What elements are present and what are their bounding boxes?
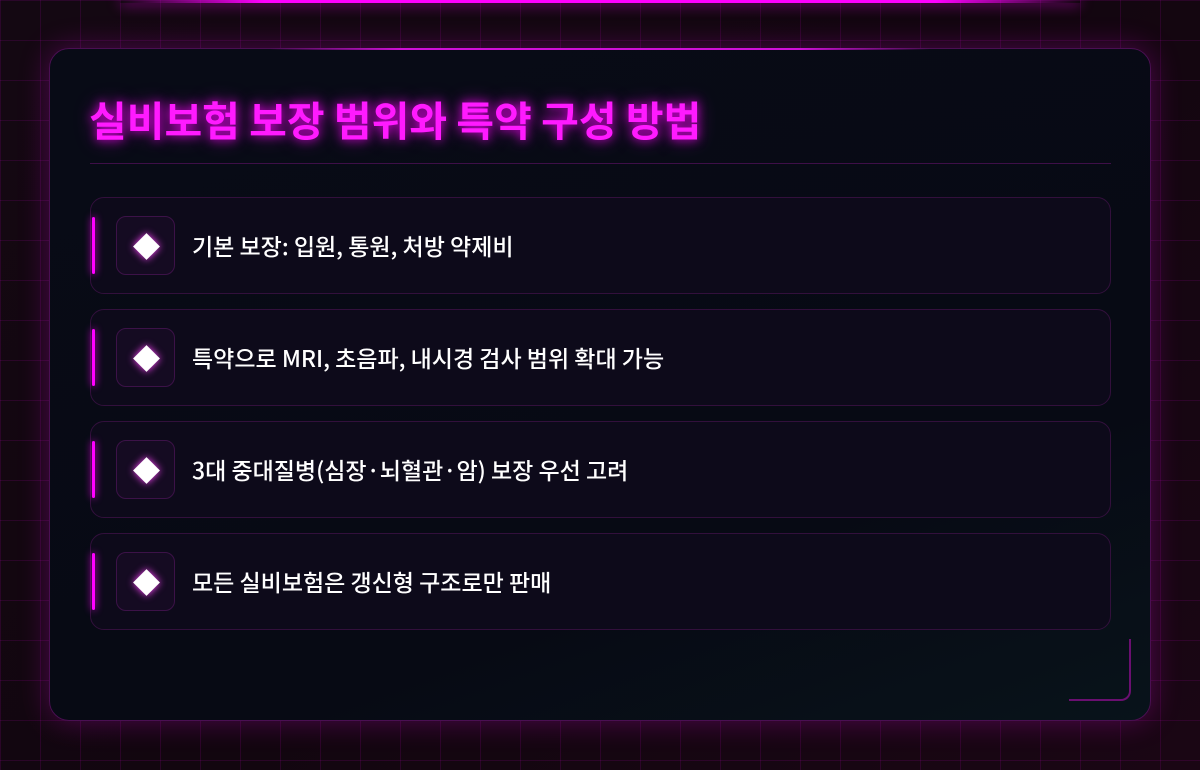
- item 3: [90, 421, 1111, 518]
- title: 실비보험 보장 범위와 특약 구성 방법: [89, 88, 701, 148]
- icon: diamond: [116, 216, 175, 275]
- icon: diamond: [116, 440, 175, 499]
- item 4: [90, 533, 1111, 630]
- text 1: 기본 보장: 입원, 통원, 처방 약제비: [192, 228, 514, 262]
- item 1: [90, 197, 1111, 294]
- icon: diamond: [116, 328, 175, 387]
- text 3: 3대 중대질병(심장·뇌혈관·암) 보장 우선 고려: [192, 452, 628, 486]
- corner bracket: [1069, 639, 1131, 701]
- text 4: 모든 실비보험은 갱신형 구조로만 판매: [192, 564, 551, 598]
- icon: diamond: [116, 552, 175, 611]
- item 2: [90, 309, 1111, 406]
- text 2: 특약으로 MRI, 초음파, 내시경 검사 범위 확대 가능: [192, 340, 664, 374]
